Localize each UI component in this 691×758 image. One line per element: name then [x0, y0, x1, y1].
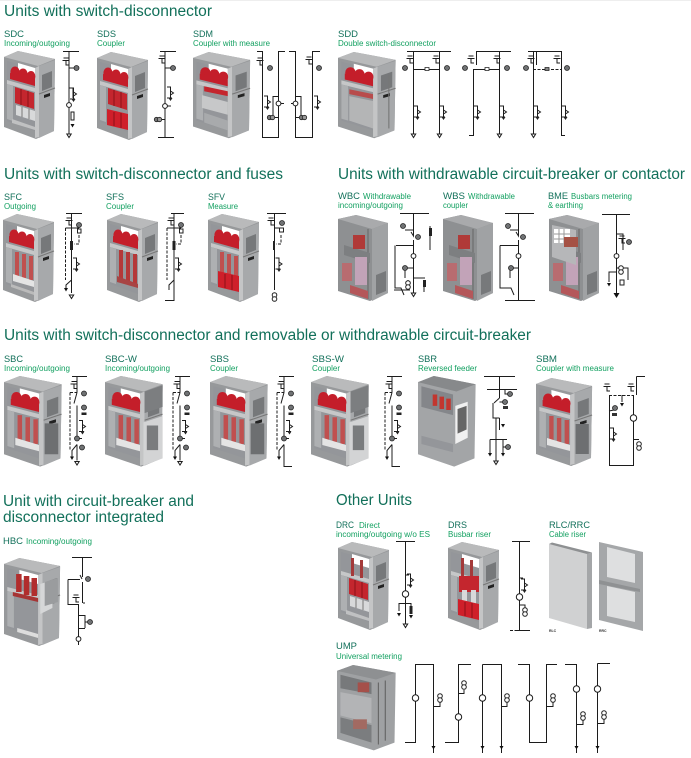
unit: BME — [548, 191, 632, 301]
unit: SBC: Incoming/outgoing — [4, 364, 70, 373]
unit: SBC: SBC — [4, 354, 23, 365]
unit: BME: Busbars metering — [571, 192, 632, 201]
unit: DRC — [336, 520, 430, 630]
unit: SBM: Coupler with measure — [536, 364, 615, 373]
unit: SFS: Coupler — [106, 202, 134, 211]
unit: SFS: SFS — [106, 192, 124, 203]
unit: SDD: Double switch-disconnector — [338, 39, 436, 48]
title: units with switch-disconnector and fuses: Units with switch-disconnector and fuses — [4, 166, 283, 183]
title: unit with circuit-breaker and disconnector integrated: disconnector integrated — [3, 509, 164, 526]
title: units with withdrawable circuit-breaker or contactor: Units with withdrawable circuit-breaker or contactor — [338, 166, 685, 183]
title: unit with circuit-breaker and disconnector integrated — [3, 493, 194, 526]
unit: SFC: SFC — [4, 192, 22, 203]
unit: SBS-W: Coupler — [312, 364, 340, 373]
title: units with switch-disconnector and removable or withdrawable circuit-breaker: Units with switch-disconnector and removable or withdrawable circuit-breaker — [4, 327, 531, 344]
unit: RLC/RRC — [549, 520, 643, 633]
unit: SDM — [193, 29, 322, 138]
unit: SDD: SDD — [338, 29, 358, 40]
unit: HBC: Incoming/outgoing — [26, 537, 92, 546]
unit: SBC-W — [105, 354, 190, 467]
unit: SDM: SDM — [193, 29, 213, 40]
unit: DRC: incoming/outgoing w/o ES — [336, 530, 430, 539]
unit: WBS: coupler — [443, 201, 468, 210]
unit: SFC: Outgoing — [4, 202, 36, 211]
unit: HBC: HBC — [3, 536, 23, 547]
title: units with switch-disconnector: Units with switch-disconnector — [4, 3, 212, 20]
unit: RLC/RRC: RLC — [549, 629, 557, 633]
title: unit with circuit-breaker and disconnector integrated: Unit with circuit-breaker and — [3, 493, 194, 510]
unit: SDM: Coupler with measure — [193, 39, 271, 48]
unit: HBC — [3, 536, 92, 646]
unit: WBS: WBS — [443, 191, 465, 202]
unit: SBC — [4, 354, 87, 467]
unit: SDS — [97, 29, 176, 140]
unit: SBR: Reversed feeder — [418, 364, 477, 373]
unit: BME: & earthing — [548, 201, 583, 210]
unit: SBR: SBR — [418, 354, 437, 365]
unit: SFV — [208, 192, 286, 302]
unit: SDS: SDS — [97, 29, 116, 40]
unit: DRS — [448, 520, 531, 630]
unit: WBC — [338, 191, 432, 301]
unit: SDC — [4, 29, 79, 139]
unit: WBC: WBC — [338, 191, 360, 202]
unit: SBS — [210, 354, 294, 467]
unit: RLC/RRC: Cable riser — [549, 530, 586, 539]
unit: SBS: Coupler — [210, 364, 238, 373]
unit: DRS: Busbar riser — [448, 530, 491, 539]
unit: SFS — [106, 192, 184, 302]
unit: DRS: DRS — [448, 520, 467, 531]
unit: SBM — [536, 354, 645, 466]
unit: UMP — [336, 641, 610, 753]
unit: BME: BME — [548, 191, 568, 202]
unit: SBS-W: SBS-W — [312, 354, 344, 365]
unit: RLC/RRC: RRC — [599, 629, 607, 633]
unit: SDC: SDC — [4, 29, 24, 40]
title: other units: Other Units — [336, 492, 412, 509]
unit: SFV: SFV — [208, 192, 226, 203]
unit: SBM: SBM — [536, 354, 557, 365]
unit: SFV: Measure — [208, 202, 239, 211]
unit: SBC-W: Incoming/outgoing — [105, 364, 170, 373]
unit: UMP: UMP — [336, 641, 357, 652]
unit: WBC: Withdrawable — [363, 192, 412, 201]
unit: WBC: incoming/outgoing — [338, 201, 403, 210]
unit: SDS: Coupler — [97, 39, 125, 48]
unit: SFC — [3, 192, 82, 302]
unit: SDC: Incoming/outgoing — [4, 39, 70, 48]
unit: WBS — [443, 191, 535, 301]
unit: SBC-W: SBC-W — [105, 354, 137, 365]
unit: WBS: Withdrawable — [468, 192, 516, 201]
unit: SDD — [338, 29, 570, 138]
unit: SBR — [418, 354, 517, 467]
unit: DRC: DRC — [336, 520, 354, 531]
unit: UMP: Universal metering — [336, 652, 402, 661]
unit: SBS-W — [311, 354, 402, 467]
unit: SBS: SBS — [210, 354, 229, 365]
unit: DRC: Direct — [359, 521, 381, 530]
unit: RLC/RRC: RLC/RRC — [549, 520, 590, 531]
